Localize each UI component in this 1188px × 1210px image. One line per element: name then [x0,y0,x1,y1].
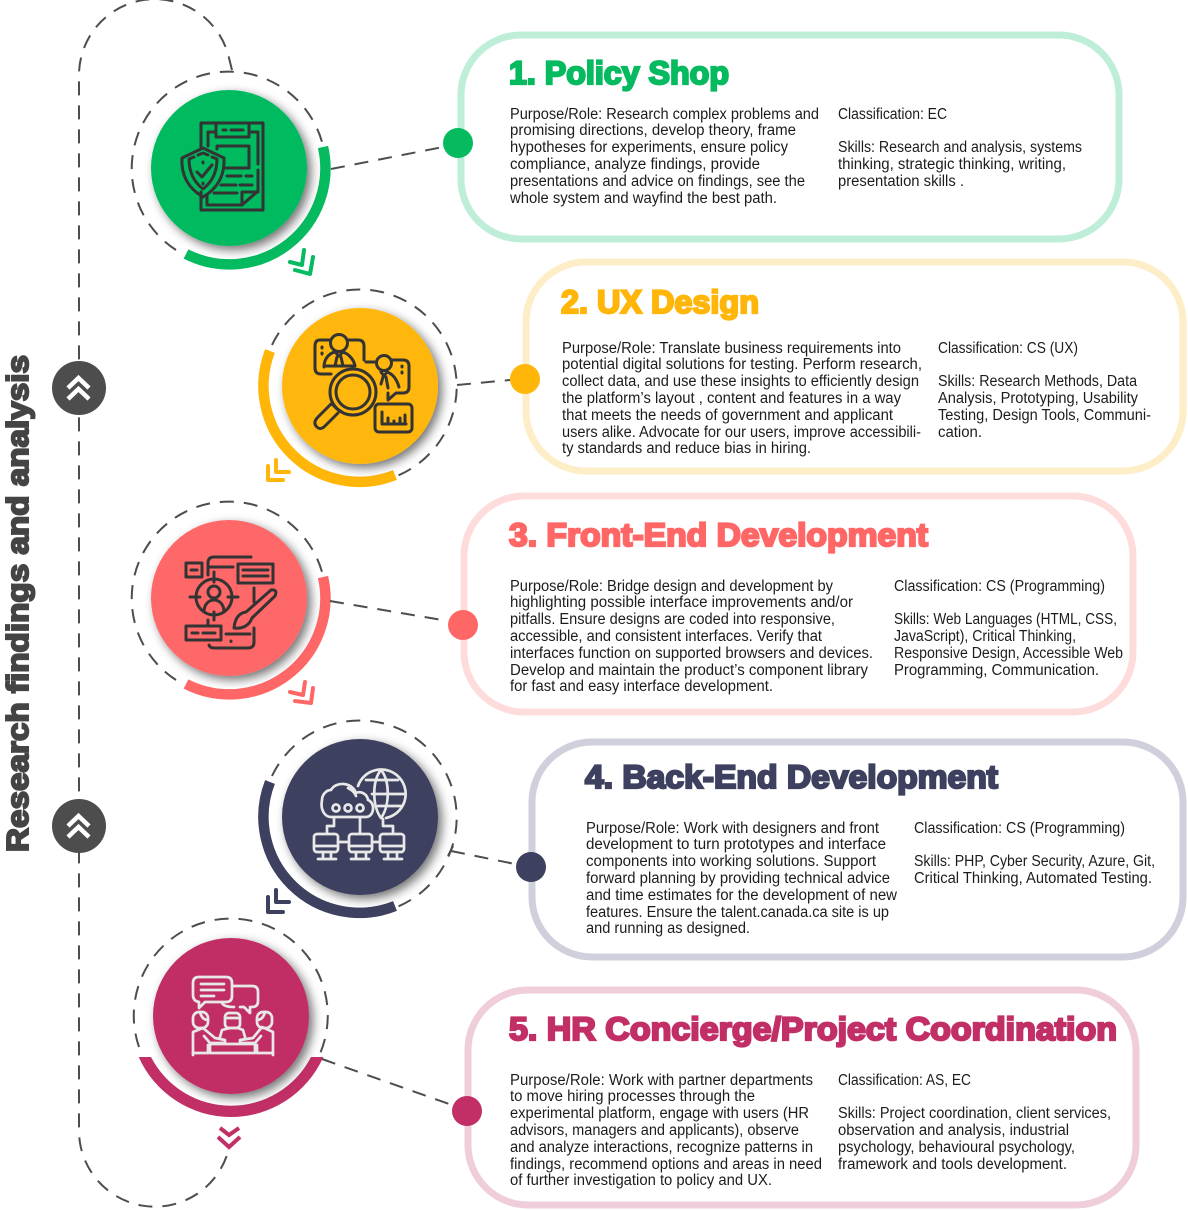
text: classification and skills: JavaScript), Critical Thinking, [894,628,1076,645]
text: purpose [509,106,819,207]
text: purpose: advisors, managers and applicants), observe [510,1122,799,1139]
text: purpose: and time estimates for the development of new [586,887,898,904]
text: purpose: features. Ensure the talent.canada.ca site is up [586,904,889,921]
icon: clipboard and shield [182,123,263,210]
vertical heading: Research findings and analysis [0,355,35,852]
text: classification and skills: Testing, Design Tools, Communi- [938,407,1151,424]
text: purpose: whole system and wayfind the best path. [509,190,777,207]
text: classification and skills: Skills: Web Languages (HTML, CSS, [894,611,1117,628]
text: classification and skills: Programming, Communication. [894,662,1099,679]
text: classification and skills: Skills: Project coordination, client services, [838,1105,1111,1122]
text: classification and skills: Skills: PHP, Cyber Security, Azure, Git, [914,853,1155,870]
text: purpose: Purpose/Role: Bridge design and development by [510,578,833,595]
panel: Back-End Development [516,742,1183,957]
text: classification and skills: Skills: Research and analysis, systems [838,139,1082,156]
text: classification and skills: Classification: CS (UX) [938,340,1078,357]
text: classification and skills: Responsive Design, Accessible Web [894,645,1123,662]
text: purpose: for fast and easy interface development. [510,678,773,695]
panel: UX Design [510,262,1183,471]
text: purpose: that meets the needs of government and applicant [562,407,894,424]
text: purpose: of further investigation to policy and UX. [510,1172,772,1189]
timeline marker: upper chevrons [52,361,106,415]
text: purpose: highlighting possible interface improvements and/or [510,594,853,611]
text: purpose: development to turn prototypes and interface [586,836,886,853]
panel: Policy Shop [443,35,1119,239]
text: classification and skills: presentation skills . [838,173,964,190]
node 1: Policy Shop [132,72,443,274]
text: purpose: the platform’s layout , content and features in a way [562,390,901,407]
text: classification and skills: Classification: AS, EC [838,1072,971,1089]
heading: 3. Front-End Development [509,517,928,553]
text: classification and skills: thinking, strategic thinking, writing, [838,156,1066,173]
text: purpose [510,578,873,695]
text: purpose: interfaces function on supported browsers and devices. [510,645,873,662]
text: purpose: and running as designed. [586,920,750,937]
text: purpose: accessible, and consistent interfaces. Verify that [510,628,823,645]
text: purpose: and analyze interactions, recognize patterns in [510,1139,813,1156]
text: purpose: hypotheses for experiments, ensure policy [510,139,788,156]
text: classification and skills [838,1072,1111,1173]
text: classification and skills: framework and tools development. [838,1156,1067,1173]
timeline: dashed path [79,0,232,1207]
text: purpose: Purpose/Role: Work with designers and front [586,820,880,837]
text: purpose: potential digital solutions for testing. Perform research, [562,356,922,373]
heading: 4. Back-End Development [585,759,998,795]
icon: interface target and brush [186,557,276,648]
text: purpose [586,820,898,937]
text: purpose: Purpose/Role: Work with partner departments [510,1072,813,1089]
heading: 5. HR Concierge/Project Coordination [509,1011,1117,1047]
node 4: Back-End Development [263,720,515,913]
icon: research magnifier [315,334,412,432]
text: purpose: forward planning by providing technical advice [586,870,890,887]
timeline marker: lower chevrons [52,799,106,853]
text: purpose: presentations and advice on findings, see the [510,173,805,190]
text: classification and skills: psychology, behavioural psychology, [838,1139,1075,1156]
text: classification and skills: Critical Thinking, Automated Testing. [914,870,1152,887]
icon: cloud network [314,769,406,859]
text: classification and skills: Classification: CS (Programming) [894,578,1105,595]
text: purpose: experimental platform, engage with users (HR [510,1105,809,1122]
text: classification and skills [938,340,1151,441]
text: purpose: Purpose/Role: Translate business requirements into [562,340,901,357]
text: purpose: findings, recommend options and areas in need [510,1156,822,1173]
panel: Front-End Development [448,496,1133,712]
text: purpose [510,1072,822,1189]
text: purpose: to move hiring processes through the [510,1088,755,1105]
text: purpose: Develop and maintain the product’s component library [510,662,868,679]
text: purpose: Purpose/Role: Research complex problems and [510,106,819,123]
heading: 2. UX Design [561,284,759,320]
text: classification and skills: Classification: CS (Programming) [914,820,1125,837]
text: purpose: ty standards and reduce bias in hiring. [562,440,811,457]
text: purpose: promising directions, develop theory, frame [510,122,796,139]
text: purpose: collect data, and use these insights to efficiently design [562,373,919,390]
text: classification and skills: cation. [938,424,982,441]
node 2: UX Design [263,289,510,482]
text: purpose: users alike. Advocate for our users, improve accessibili- [562,424,921,441]
heading: 1. Policy Shop [509,55,729,91]
text: classification and skills [914,820,1155,887]
text: classification and skills: Skills: Research Methods, Data [938,373,1137,390]
text: classification and skills: observation and analysis, industrial [838,1122,1069,1139]
text: classification and skills: Classification: EC [838,106,947,123]
text: purpose: components into working solutions. Support [586,853,877,870]
node 3: Front-End Development [132,502,448,703]
icon: meeting [193,977,273,1055]
text: purpose: pitfalls. Ensure designs are coded into responsive, [510,611,835,628]
panel: HR Concierge/Project Coordination [452,990,1136,1205]
text: classification and skills: Analysis, Prototyping, Usability [938,390,1138,407]
node 5: HR Concierge [134,919,452,1147]
text: purpose: compliance, analyze findings, provide [510,156,760,173]
text: classification and skills [838,106,1082,190]
text: purpose [562,340,922,457]
text: classification and skills [894,578,1123,679]
